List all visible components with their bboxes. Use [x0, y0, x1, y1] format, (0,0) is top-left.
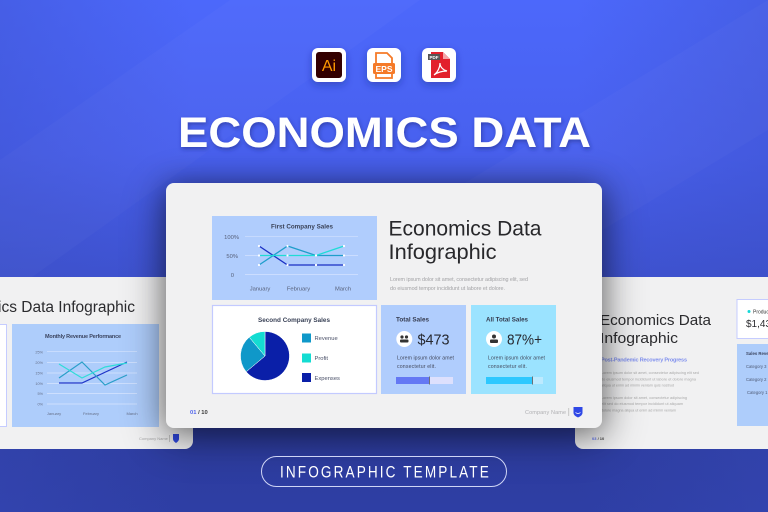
- total sales card: $473: [418, 332, 450, 348]
- left slide heading: ics Data Infographic: [0, 299, 135, 316]
- right slide subtitle: Post-Pandemic Recovery Progress: [601, 358, 687, 364]
- all total sales card: All Total Sales: [486, 316, 528, 324]
- y axis labels: 100%: [224, 235, 239, 241]
- all total sales card: consectetur elit.: [488, 364, 527, 370]
- template badge: INFOGRAPHIC TEMPLATE: [280, 463, 489, 482]
- company footer: Company Name: [525, 410, 566, 416]
- right slide body text: Lorem ipsum dolor sit amet, consectetur adipiscing elit sed: [601, 371, 699, 375]
- left chart panel: 5%: [38, 392, 44, 396]
- left white panel: [0, 324, 6, 426]
- left chart panel: 0%: [38, 402, 44, 406]
- panel: right slide: [575, 277, 768, 449]
- icon: EPS file: [367, 48, 401, 82]
- right slide heading: [600, 313, 712, 347]
- second company sales pie panel: [212, 306, 376, 394]
- right slide body text: dolore magna aliqua ut enim ad minim veniam: [601, 408, 676, 412]
- icon: PDF file: PDF: [430, 55, 439, 60]
- y axis labels: 0: [231, 273, 234, 279]
- legend: Expenses: [314, 376, 340, 382]
- main heading: Infographic: [388, 241, 496, 264]
- right slide heading: Infographic: [600, 331, 678, 347]
- left chart panel: [12, 324, 159, 427]
- chart lines: [259, 246, 344, 265]
- title: ECONOMICS DATA: [178, 109, 591, 157]
- right sales panel: Category 3: [746, 364, 767, 369]
- page number: 01 / 10: [190, 410, 208, 416]
- panel: left slide: [0, 277, 193, 449]
- all total sales card: Lorem ipsum dolor amet: [488, 356, 546, 362]
- right slide heading: Economics Data: [600, 313, 712, 329]
- right slide body text: do eiusmod tempor incididunt ut labore et dolore magna: [601, 378, 697, 382]
- right product card: [737, 300, 768, 338]
- y axis labels: [224, 235, 239, 279]
- first company sales chart: [212, 216, 377, 300]
- x axis labels: January: [250, 286, 270, 292]
- total sales card: Lorem ipsum dolor amet: [397, 356, 455, 362]
- pie title: Second Company Sales: [258, 317, 330, 324]
- legend: [302, 334, 340, 382]
- left chart panel: February: [83, 411, 99, 416]
- right slide body text: aliqua ut enim ad minim veniam quis nostrud: [601, 384, 674, 388]
- icon: Adobe Illustrator: Ai: [322, 58, 336, 75]
- total sales card: [381, 305, 466, 394]
- template badge: [262, 456, 506, 486]
- icon: people: [396, 331, 412, 347]
- right sales panel: Category 2: [746, 377, 767, 382]
- main heading: [388, 218, 542, 264]
- all total sales card: [471, 305, 556, 394]
- pie chart: [240, 331, 289, 381]
- left chart panel: 20%: [35, 361, 44, 365]
- all total sales card: 87%+: [507, 332, 542, 348]
- right slide body text: Lorem ipsum dolor sit amet, consectetur adipiscing: [601, 396, 687, 400]
- left chart panel: March: [126, 411, 138, 416]
- icon: PDF file: [422, 48, 456, 82]
- x axis labels: February: [287, 286, 310, 292]
- right sales panel: [737, 344, 768, 426]
- main body text: do eiusmod tempor incididunt ut labore et dolore.: [390, 286, 505, 292]
- main heading: Economics Data: [388, 218, 542, 240]
- right footer page number: 03 / 10: [592, 436, 605, 441]
- right slide body text: [601, 371, 699, 412]
- left chart panel: Monthly Revenue Performance: [45, 334, 121, 340]
- panel: main slide: [166, 183, 602, 428]
- left chart panel: 15%: [35, 372, 44, 376]
- total sales card: consectetur elit.: [397, 364, 436, 370]
- chart title: First Company Sales: [271, 224, 333, 230]
- progress bar: [486, 376, 543, 384]
- legend: Profit: [314, 356, 328, 362]
- right slide body text: elit sed do eiusmod tempor incididunt ut aliquam: [601, 402, 683, 406]
- left chart panel: 25%: [35, 350, 44, 354]
- main slide wide shadow: [162, 190, 606, 440]
- legend: Revenue: [314, 336, 338, 342]
- y axis labels: 50%: [226, 254, 238, 260]
- left footer: [139, 434, 179, 443]
- left chart panel: January: [47, 411, 61, 416]
- total sales card: Total Sales: [396, 316, 429, 324]
- company footer: [525, 407, 582, 418]
- icon: EPS file: EPS: [375, 64, 393, 74]
- right sales panel: Category 1: [747, 390, 768, 395]
- main body text: Lorem ipsum dolor sit amet, consectetur adipiscing elit, sed: [390, 277, 528, 283]
- format icons: [312, 48, 456, 82]
- x axis labels: [250, 286, 351, 292]
- icon: Adobe Illustrator: [312, 48, 346, 82]
- left chart panel: 10%: [35, 382, 44, 386]
- main body text: [390, 277, 528, 292]
- progress bar: [396, 376, 453, 384]
- icon: person: [486, 331, 502, 347]
- left footer: Company Name: [139, 436, 169, 441]
- x axis labels: March: [335, 286, 351, 292]
